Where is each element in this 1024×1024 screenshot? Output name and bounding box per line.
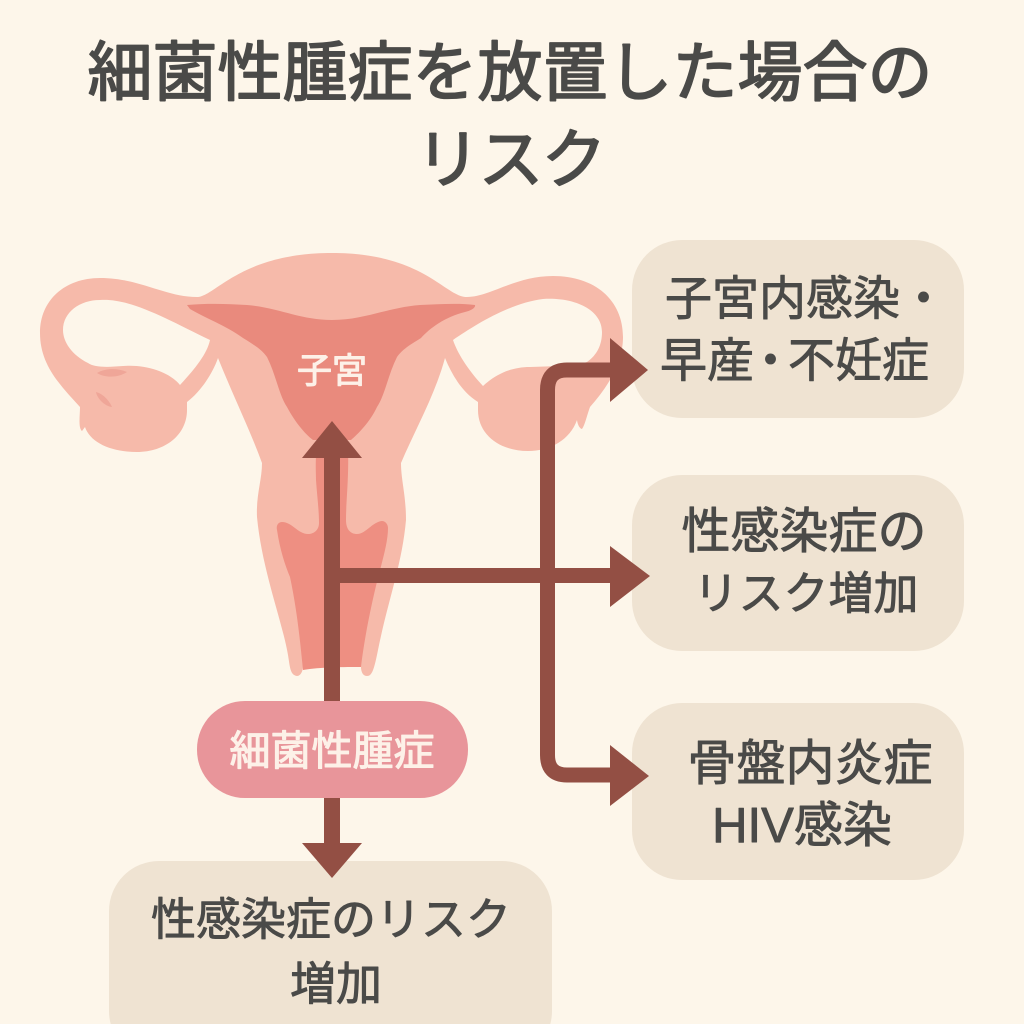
box: STI risk: 性感染症の (681, 505, 927, 559)
title: リスク (415, 123, 605, 196)
cervical canal and vagina (277, 445, 388, 670)
box: PID and HIV: 骨盤内炎症 (687, 737, 933, 791)
left tube opening (63, 300, 210, 385)
right tube opening (453, 299, 602, 386)
uterus illustration (40, 253, 623, 676)
box: STI risk (632, 475, 964, 651)
arrow: to top and bottom boxes (548, 370, 612, 775)
box: intrauterine infection: 子宮内感染・ (665, 272, 947, 325)
box: intrauterine infection (632, 240, 964, 418)
ovary spots (96, 369, 127, 407)
organ label: 子宮 (297, 352, 367, 391)
arrow: branch to middle box (340, 546, 650, 607)
arrowhead: bottom box (610, 745, 649, 806)
arrow: down to bottom box (302, 798, 362, 878)
title (88, 36, 932, 196)
box: PID and HIV: HIV感染 (712, 799, 892, 853)
box: bottom STI risk: 性感染症のリスク (151, 894, 511, 945)
uterine cavity (187, 304, 475, 440)
title: 細菌性腫症を放置した場合の (88, 36, 932, 109)
box: STI risk: リスク増加 (693, 568, 919, 619)
box: bottom STI risk (109, 861, 552, 1024)
box: bottom STI risk: 増加 (290, 958, 382, 1010)
arrow: to uterus (302, 421, 362, 701)
arrowhead: top box (610, 338, 648, 402)
box: intrauterine infection: 早産・不妊症 (660, 334, 929, 387)
arrows (302, 338, 650, 878)
box: PID and HIV (632, 703, 964, 880)
organ silhouette (40, 253, 623, 676)
pill: bacterial vaginosis (197, 701, 468, 798)
pill: bacterial vaginosis: 細菌性腫症 (230, 728, 434, 774)
